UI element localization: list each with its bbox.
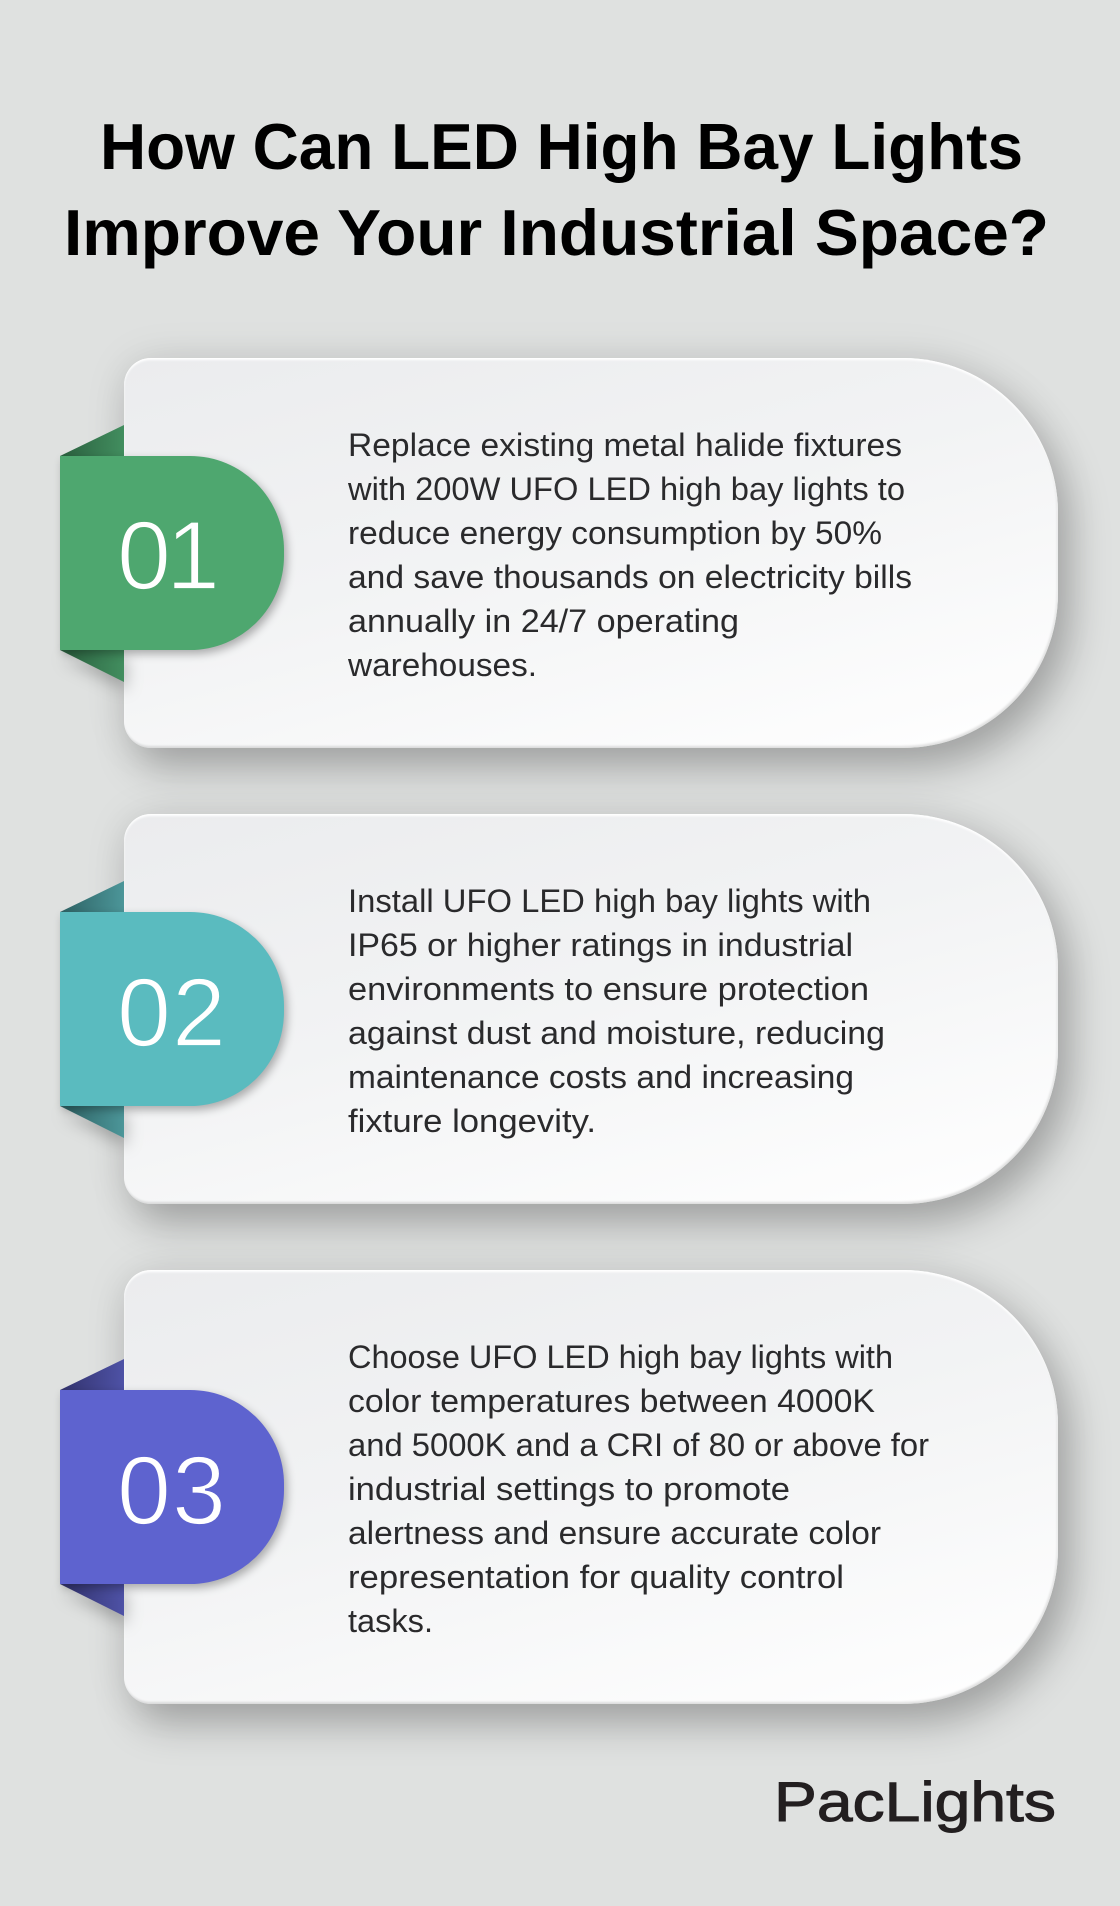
- title: Improve Your Industrial Space?: [64, 196, 1049, 269]
- text block 02: maintenance costs and increasing: [348, 1059, 854, 1095]
- text block 02: against dust and moisture, reducing: [348, 1015, 885, 1051]
- text block 02: Install UFO LED high bay lights with: [348, 883, 871, 919]
- text block 03: industrial settings to promote: [348, 1471, 790, 1507]
- text block 03: tasks.: [348, 1603, 433, 1639]
- card background 03: [124, 1270, 1058, 1704]
- panel: step 03: [58, 1258, 1092, 1744]
- number badge 02: [60, 912, 284, 1106]
- text block 01: warehouses.: [347, 647, 537, 683]
- card background 02: [124, 814, 1058, 1204]
- text block 01: and save thousands on electricity bills: [348, 559, 912, 595]
- card background 01: [124, 358, 1058, 748]
- text block 02: fixture longevity.: [348, 1103, 596, 1139]
- ribbon fold bottom 01: [60, 650, 134, 693]
- text block 03: alertness and ensure accurate color: [348, 1515, 881, 1551]
- title: [64, 110, 1049, 269]
- ribbon fold top 02: [60, 881, 124, 912]
- ribbon fold top 03: [60, 1359, 124, 1390]
- number badge 01: [60, 456, 284, 650]
- text block 03: color temperatures between 4000K: [348, 1383, 875, 1419]
- text block 03: [348, 1339, 929, 1639]
- panel: step 01: [58, 346, 1092, 788]
- panel: step 02: [58, 802, 1092, 1244]
- text block 01: Replace existing metal halide fixtures: [348, 427, 902, 463]
- logo: PacLights: PacLights: [774, 1770, 1056, 1833]
- text block 01: reduce energy consumption by 50%: [348, 515, 882, 551]
- text block 03: and 5000K and a CRI of 80 or above for: [348, 1427, 929, 1463]
- text block 01: annually in 24/7 operating: [348, 603, 739, 639]
- text block 01: [347, 427, 912, 683]
- number badge 03: [60, 1390, 284, 1584]
- text block 03: representation for quality control: [348, 1559, 844, 1595]
- title: How Can LED High Bay Lights: [100, 110, 1023, 183]
- number 03: 03: [117, 1436, 226, 1545]
- text block 02: [348, 883, 885, 1139]
- ribbon fold bottom 03: [60, 1584, 134, 1627]
- text block 01: with 200W UFO LED high bay lights to: [347, 471, 905, 507]
- text block 02: IP65 or higher ratings in industrial: [348, 927, 853, 963]
- text block 03: Choose UFO LED high bay lights with: [348, 1339, 893, 1375]
- ribbon fold bottom 02: [60, 1106, 134, 1149]
- number 02: 02: [117, 958, 226, 1067]
- text block 02: environments to ensure protection: [348, 971, 869, 1007]
- number 01: 01: [117, 501, 220, 610]
- ribbon fold top 01: [60, 425, 124, 456]
